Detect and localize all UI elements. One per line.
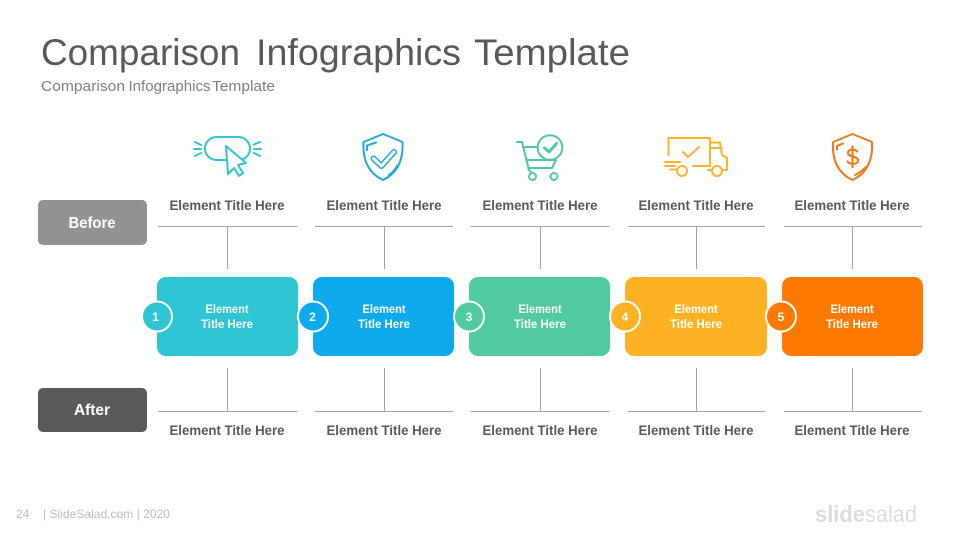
card 4: 4 [622, 310, 629, 324]
column 1: after title [158, 368, 297, 438]
column 5: before title: Element Title Here [794, 197, 910, 213]
card 2: Title Here [358, 317, 410, 331]
column 3: after title: Element Title Here [482, 422, 598, 438]
title [41, 32, 630, 73]
column 4: before title [628, 197, 765, 269]
column 5: after title [784, 368, 922, 438]
column 5: after title: Element Title Here [794, 422, 910, 438]
column 1: before title [158, 197, 297, 269]
label: after [38, 388, 147, 432]
footer: page number and credit: 24 [16, 507, 30, 521]
column 4: after title: Element Title Here [638, 422, 754, 438]
card 1: 1 [152, 310, 159, 324]
label: before: Before [68, 215, 116, 232]
icon: shield check [363, 134, 403, 180]
card 2: Element [362, 302, 406, 316]
subtitle [41, 79, 275, 95]
card 1 [142, 277, 298, 356]
card 2 [298, 277, 454, 356]
column 2: before title [315, 197, 453, 269]
card 5: 5 [778, 310, 785, 324]
card 5 [766, 277, 923, 356]
footer: logo wordmark: slide [815, 501, 865, 527]
card 4 [610, 277, 767, 356]
subtitle: Comparison [41, 79, 125, 95]
subtitle: Template [212, 79, 275, 95]
column 3: after title [471, 368, 609, 438]
title: Infographics [256, 32, 461, 73]
card 3: Title Here [514, 317, 566, 331]
column 3: before title [471, 197, 609, 269]
column 4: after title [628, 368, 765, 438]
column 1: before title: Element Title Here [170, 197, 285, 213]
label: after: After [74, 402, 110, 419]
card 3 [454, 277, 610, 356]
column 2: after title: Element Title Here [326, 422, 442, 438]
column 1: after title: Element Title Here [170, 422, 285, 438]
column 2: before title: Element Title Here [326, 197, 442, 213]
card 3: 3 [466, 310, 473, 324]
icon: shield dollar [833, 134, 872, 180]
card 5: Title Here [826, 317, 878, 331]
column 3: before title: Element Title Here [482, 197, 598, 213]
icon: button click [194, 137, 261, 176]
label: before [38, 200, 147, 245]
footer: page number and credit: | SlideSalad.com | 2020 [43, 507, 170, 521]
icon: delivery truck [665, 138, 727, 176]
column 2: after title [315, 368, 453, 438]
card 4: Title Here [670, 317, 722, 331]
card 1: Title Here [201, 317, 253, 331]
card 4: Element [674, 302, 718, 316]
title: Comparison [41, 32, 240, 73]
footer: logo wordmark [815, 501, 917, 527]
card 2: 2 [309, 310, 316, 324]
column 4: before title: Element Title Here [638, 197, 754, 213]
card 5: Element [830, 302, 874, 316]
icon: shopping cart [517, 135, 562, 180]
card 1: Element [206, 302, 248, 316]
card 3: Element [518, 302, 562, 316]
column 5: before title [784, 197, 922, 269]
title: Template [474, 32, 630, 73]
footer: logo wordmark: salad [865, 501, 917, 527]
subtitle: Infographics [128, 79, 210, 95]
